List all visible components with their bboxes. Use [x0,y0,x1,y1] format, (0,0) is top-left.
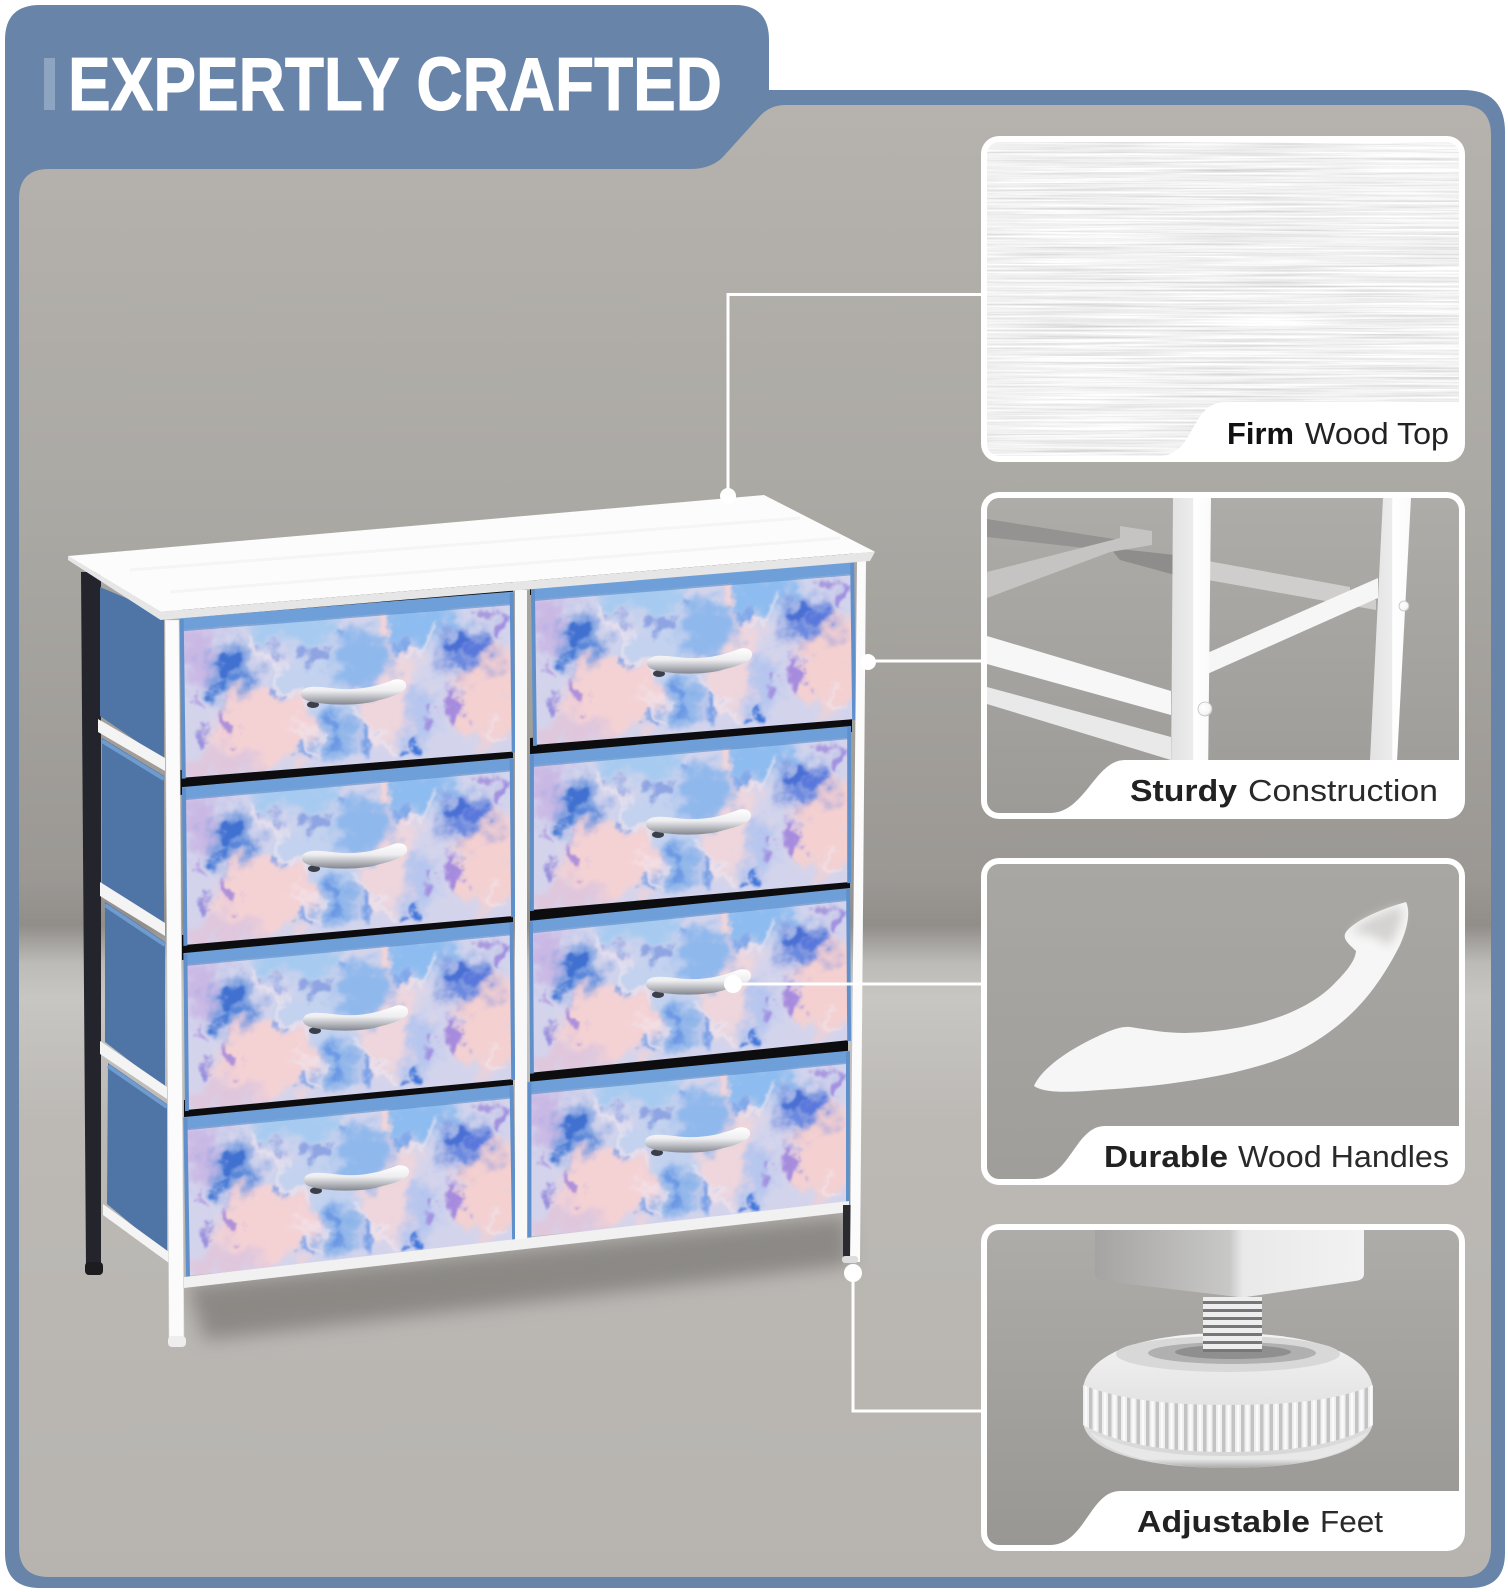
panel: sturdy construction [981,492,1465,819]
wood grain image [987,142,1459,456]
frame close-up [987,498,1459,813]
drawer gaps [180,548,853,1125]
drawer 6 [501,858,879,1104]
drawer 5 [154,891,544,1142]
label text: Feet [1320,1504,1383,1539]
drawer 2 [502,531,885,777]
drawer 8 [499,1020,878,1268]
wood top [68,495,875,620]
drawer 1 [150,561,545,810]
white steel frame [165,560,866,1347]
drawer 3 [153,727,544,977]
label text: Wood Top [1305,416,1449,451]
label tab [1035,1126,1459,1179]
panel: firm wood top [981,136,1465,462]
callout connector lines [728,294,981,1411]
label text: Wood Handles [1238,1139,1449,1174]
floor shadow [187,1215,850,1340]
drawer 7 [154,1053,546,1309]
label text: Durable [1104,1139,1228,1174]
label tab [1050,1491,1459,1545]
connector dots [720,488,876,1282]
title: EXPERTLY CRAFTED [68,42,722,126]
label text: Adjustable [1137,1504,1310,1539]
panel: durable wood handles [981,858,1465,1185]
label text: Firm [1227,416,1294,451]
panel: adjustable feet [981,1224,1465,1551]
side panel top bands [102,741,167,1107]
label tab [1050,760,1459,813]
handle close-up [987,864,1459,1179]
dresser product illustration [68,495,885,1347]
drawer handles [301,648,752,1194]
foot close-up [987,1230,1459,1545]
side rails [98,719,169,1263]
label text: Sturdy [1130,773,1238,808]
back leg [81,572,103,1275]
side fabric panels [100,587,167,1254]
label text: Construction [1248,773,1438,808]
drawer 4 [502,695,879,942]
label tab [1160,402,1459,456]
